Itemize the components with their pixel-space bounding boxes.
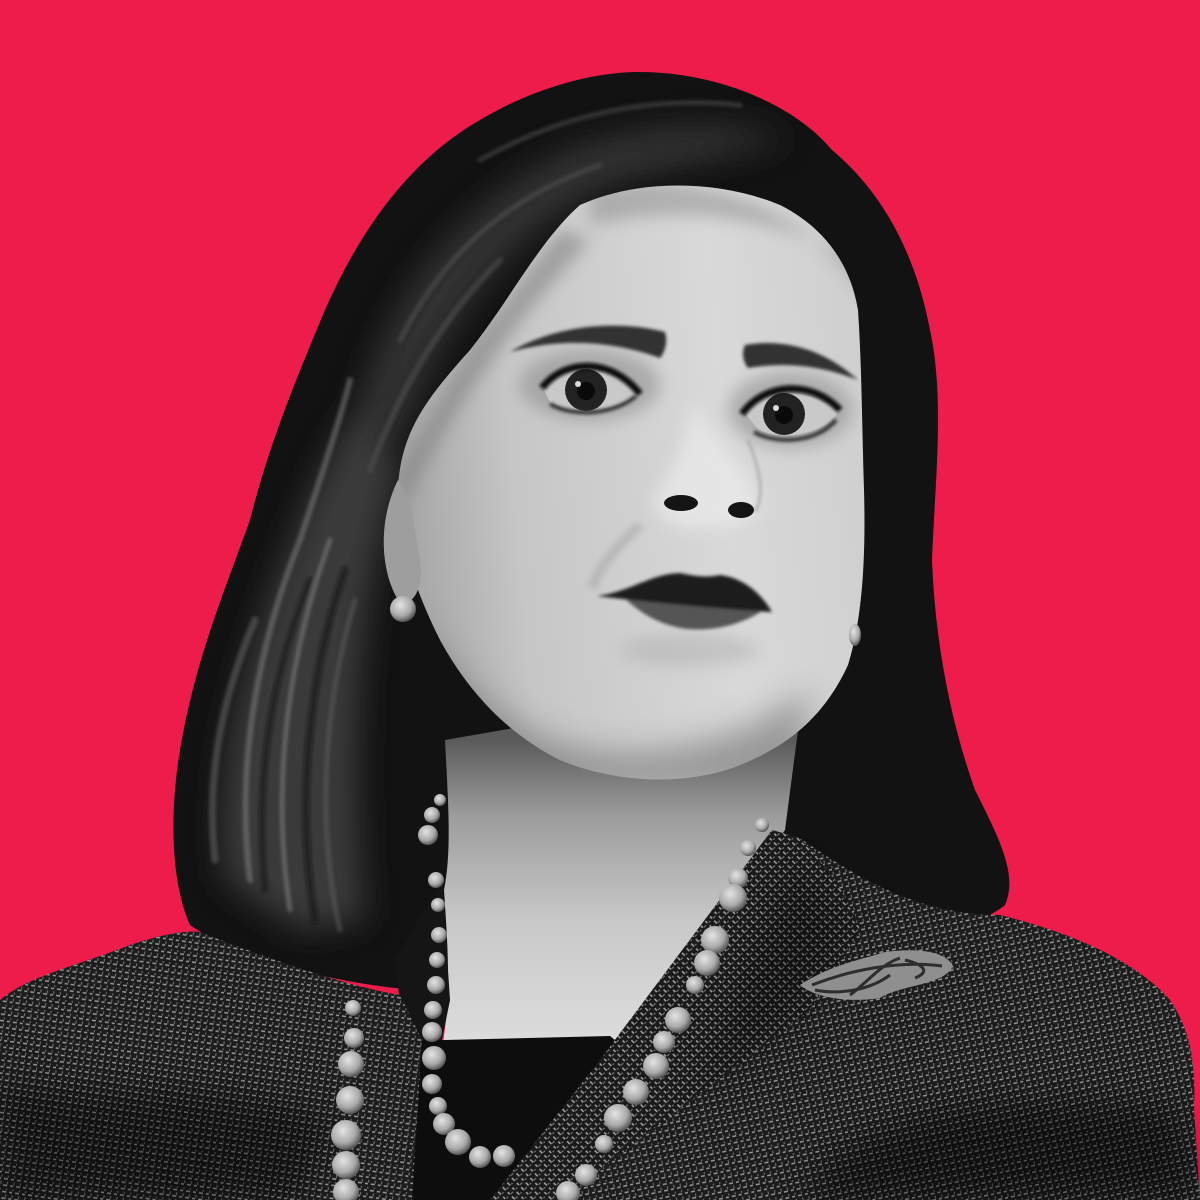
nasolabial fold (592, 525, 640, 588)
left eyebrow (510, 326, 666, 358)
black top (405, 1036, 640, 1200)
right eye (742, 389, 840, 440)
jacket: right side (490, 830, 1200, 1200)
hair strands (212, 102, 740, 930)
neck (440, 715, 800, 1060)
dark pocket beside neck (395, 880, 450, 1050)
nose (654, 400, 760, 528)
left earring (390, 596, 416, 622)
shadow below lip (620, 634, 760, 666)
left eye (542, 366, 640, 412)
outer left strand (331, 1000, 364, 1200)
ear (384, 480, 421, 603)
brooch (800, 950, 953, 1000)
pearl necklace (331, 794, 769, 1200)
jacket shading (0, 860, 1200, 1200)
right earring (849, 624, 861, 646)
lapel (490, 830, 860, 1200)
hair (173, 72, 1009, 990)
face shading (395, 183, 870, 790)
right eyebrow (743, 343, 858, 380)
face (384, 183, 870, 790)
upper left strand (418, 794, 515, 1168)
lips (597, 573, 772, 629)
eye socket shadows (520, 349, 660, 421)
right strand (556, 818, 769, 1200)
jacket: left side (0, 932, 422, 1200)
hair broad sheen (222, 126, 790, 930)
